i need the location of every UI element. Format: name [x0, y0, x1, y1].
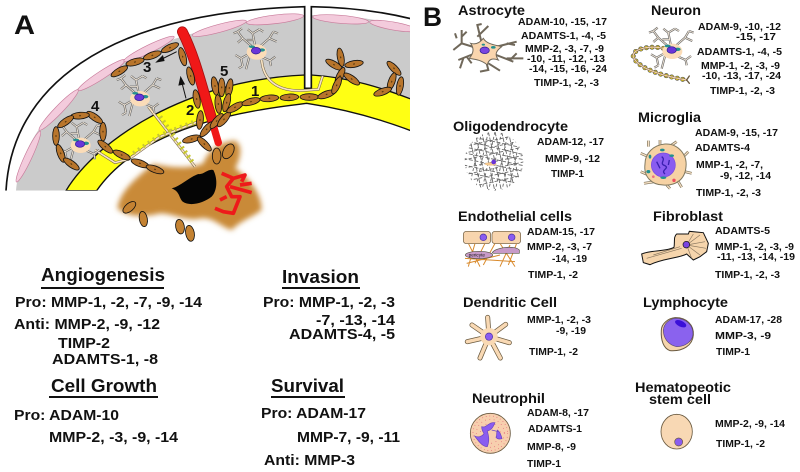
block: Angiogenesis: Angiogenesis [41, 265, 165, 285]
block: Invasion: Invasion [282, 267, 359, 287]
panel: Neuron: Neuron [651, 2, 701, 18]
panel: Neutrophil: MMP-8, -9 [527, 442, 576, 453]
block: Angiogenesis: ADAMTS-1, -8 [52, 351, 158, 368]
panel: Neutrophil: Neutrophil [472, 390, 545, 406]
icon: astrocyte [453, 24, 523, 72]
panel: Lymphocyte: TIMP-1 [716, 347, 750, 358]
block: Survival [261, 376, 400, 469]
route numbers: 3 [143, 59, 151, 76]
panel: Neuron: MMP-1, -2, -3, -9 [701, 61, 780, 72]
icon: fibroblast [642, 231, 708, 265]
block: Invasion: Pro: MMP-1, -2, -3 [263, 294, 395, 311]
panel: Lymphocyte: MMP-3, -9 [715, 331, 772, 342]
route numbers: 1 [251, 83, 259, 100]
panel: Oligodendrocyte [453, 118, 604, 192]
route arrows [157, 52, 186, 98]
panel: Endothelial cells: Endothelial cells [458, 208, 572, 224]
panel: Astrocyte: TIMP-1, -2, -3 [534, 78, 599, 89]
panel: Dendritic Cell [463, 294, 591, 358]
panel: Endothelial cells: TIMP-1, -2 [528, 270, 578, 281]
panel: Oligodendrocyte: ADAM-12, -17 [537, 137, 604, 148]
panel: Hematopeotic stem cell [635, 379, 785, 450]
block: Cell Growth [14, 376, 179, 446]
panel: Neutrophil [470, 390, 589, 470]
route numbers: 2 [186, 102, 194, 119]
panel: Neuron: -15, -17 [736, 32, 777, 43]
panel: Astrocyte: ADAM-10, -15, -17 [518, 17, 607, 28]
panel: Neuron: TIMP-1, -2, -3 [710, 86, 775, 97]
panel: Lymphocyte: Lymphocyte [643, 294, 728, 310]
panel: Neuron: ADAM-9, -10, -12 [698, 22, 781, 33]
panel: Hematopeotic stem cell: TIMP-1, -2 [716, 439, 765, 450]
panel: Astrocyte: Astrocyte [458, 2, 525, 18]
block: Invasion: ADAMTS-4, -5 [289, 326, 395, 343]
block: Survival: Survival [271, 376, 344, 396]
block: Invasion: -7, -13, -14 [316, 312, 396, 329]
panel: Endothelial cells [458, 208, 595, 281]
panel: Hematopeotic stem cell: Hematopeotic [635, 379, 731, 395]
panel: Lymphocyte [643, 294, 782, 358]
panel: Endothelial cells: MMP-2, -3, -7 [527, 242, 592, 253]
panel: Astrocyte: MMP-2, -3, -7, -9 [525, 44, 604, 55]
panel: Microglia: ADAMTS-4 [695, 143, 750, 154]
panel: Microglia: ADAM-9, -15, -17 [695, 128, 778, 139]
icon: lymphocyte [661, 318, 693, 351]
block: Angiogenesis: TIMP-2 [58, 335, 110, 352]
panel: Fibroblast: TIMP-1, -2, -3 [715, 270, 780, 281]
panel: Oligodendrocyte: TIMP-1 [551, 169, 584, 180]
panel: Fibroblast: Fibroblast [653, 208, 723, 224]
icon: microglia [641, 140, 692, 189]
grey cortex right [312, 15, 413, 100]
panel: Endothelial cells: ADAM-15, -17 [527, 227, 595, 238]
neuron 1 with axon [233, 28, 323, 91]
panel: Neuron: -10, -13, -17, -24 [702, 71, 781, 82]
block: Invasion [263, 267, 396, 343]
block: Angiogenesis [14, 265, 203, 368]
tumor mass [117, 141, 262, 230]
panel: Dendritic Cell: Dendritic Cell [463, 294, 557, 310]
yellow white-matter band [66, 75, 413, 191]
route numbers: 5 [220, 63, 228, 80]
migrating tumor cells [53, 41, 405, 242]
panel A: brain tumor diagram [6, 7, 418, 242]
panel: Microglia: Microglia [638, 109, 701, 125]
panel: Neutrophil: ADAMTS-1 [528, 424, 582, 435]
panel: Hematopeotic stem cell: MMP-2, -9, -14 [715, 419, 785, 430]
panel: Dendritic Cell: MMP-1, -2, -3 [527, 315, 591, 326]
panel: Microglia [638, 109, 778, 199]
block: Angiogenesis: Anti: MMP-2, -9, -12 [14, 316, 160, 333]
block: Angiogenesis: Pro: MMP-1, -2, -7, -9, -14 [15, 294, 203, 311]
icon: neuron [633, 28, 694, 83]
panel: Endothelial cells: -14, -19 [552, 254, 587, 265]
icon: dendritic cell [467, 317, 509, 358]
panel: Lymphocyte: ADAM-17, -28 [715, 315, 782, 326]
panel: Astrocyte: -10, -11, -12, -13 [527, 54, 605, 65]
grey cortex left [16, 15, 304, 191]
panel: Fibroblast: MMP-1, -2, -3, -9 [715, 242, 794, 253]
panel: Fibroblast [642, 208, 795, 281]
route numbers [91, 59, 259, 119]
block: Cell Growth: MMP-2, -3, -9, -14 [49, 429, 179, 446]
red blood vessel [182, 32, 218, 143]
panel: Oligodendrocyte: Oligodendrocyte [453, 118, 568, 134]
panel: Astrocyte [453, 2, 607, 89]
panel: Astrocyte: ADAMTS-1, -4, -5 [521, 31, 606, 42]
panel: Dendritic Cell: -9, -19 [556, 326, 586, 337]
label B: B [423, 2, 442, 32]
panel: Dendritic Cell: TIMP-1, -2 [529, 347, 578, 358]
panel: Neutrophil: TIMP-1 [527, 459, 561, 470]
route numbers: 4 [91, 98, 100, 115]
panel: Microglia: -9, -12, -14 [720, 171, 771, 182]
block: Cell Growth: Pro: ADAM-10 [14, 407, 119, 424]
block: Survival: Pro: ADAM-17 [261, 405, 366, 422]
skull outline [6, 7, 413, 191]
block: Survival: MMP-7, -9, -11 [297, 429, 400, 446]
panel: Neuron: ADAMTS-1, -4, -5 [697, 47, 782, 58]
icon: oligodendrocyte [463, 132, 525, 192]
neuron 3 with axon [57, 121, 198, 163]
panel: Microglia: TIMP-1, -2, -3 [696, 188, 761, 199]
block: Survival: Anti: MMP-3 [264, 452, 355, 469]
neuron 2 with axon [117, 75, 195, 167]
necrotic core [172, 170, 216, 204]
panel: Astrocyte: -14, -15, -16, -24 [529, 64, 607, 75]
panel: Hematopeotic stem cell: stem cell [649, 391, 711, 407]
panel: Neuron [633, 2, 782, 97]
tumor vessels [215, 173, 252, 213]
icon: endothelial cells and pericyte: pericyte [469, 253, 485, 258]
icon: stem cell [661, 414, 692, 449]
panel: Microglia: MMP-1, -2, -7, [696, 160, 763, 171]
icon: neutrophil [470, 413, 510, 453]
block: Cell Growth: Cell Growth [51, 376, 157, 396]
panel: Neutrophil: ADAM-8, -17 [527, 408, 589, 419]
pink meningeal cells [13, 12, 418, 184]
panel: Fibroblast: ADAMTS-5 [715, 226, 770, 237]
label A: A [14, 10, 35, 40]
panel: Oligodendrocyte: MMP-9, -12 [545, 154, 600, 165]
panel: Fibroblast: -11, -13, -14, -19 [717, 252, 795, 263]
